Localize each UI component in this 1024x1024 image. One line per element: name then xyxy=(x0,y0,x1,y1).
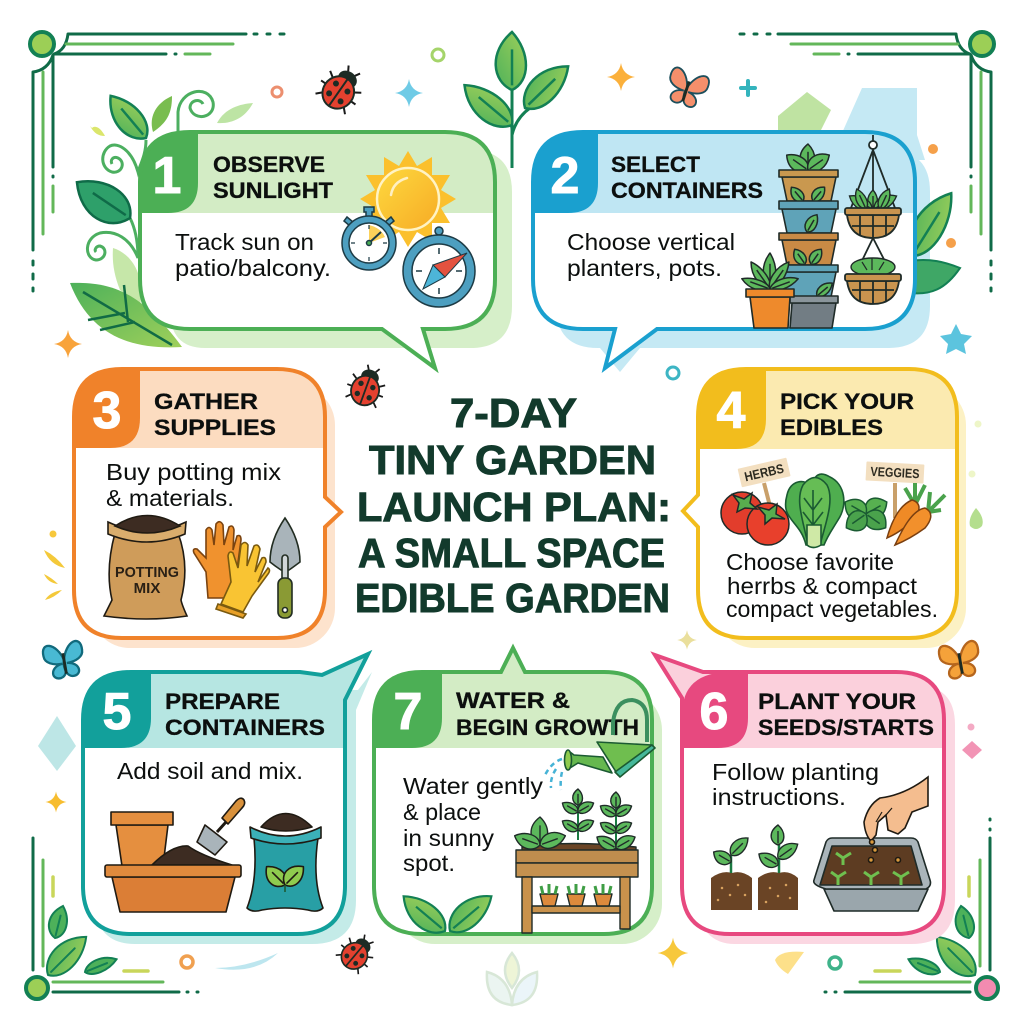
body text xyxy=(403,773,544,876)
heading xyxy=(154,389,276,440)
heading: SELECT xyxy=(611,152,701,177)
icon: ladybug top xyxy=(312,57,372,118)
heading xyxy=(165,689,325,740)
body text: compact vegetables. xyxy=(726,596,938,622)
swoosh: pale blue xyxy=(215,953,278,970)
heading: SEEDS/STARTS xyxy=(758,715,934,740)
body text xyxy=(567,229,735,281)
body text: Add soil and mix. xyxy=(117,758,303,784)
icon: veggies sign: VEGGIES xyxy=(870,464,920,481)
body text xyxy=(712,759,879,810)
heading: BEGIN GROWTH xyxy=(456,715,639,740)
number 5: 5 xyxy=(103,683,131,741)
icon: seedlings in soil xyxy=(710,825,801,910)
dots: pale green right xyxy=(972,424,978,474)
icon: hand with seeds xyxy=(864,777,928,862)
body text: patio/balcony. xyxy=(175,255,331,281)
ring: green xyxy=(432,49,444,61)
ring: orange bottom xyxy=(181,956,193,968)
icon: compass xyxy=(403,227,475,307)
number 1: 1 xyxy=(153,147,181,205)
body text: instructions. xyxy=(712,784,846,810)
title: 7-DAY xyxy=(450,390,577,436)
sparkle: gold left xyxy=(46,792,66,812)
body text: in sunny xyxy=(403,825,495,851)
shadow: card 2 xyxy=(556,150,930,372)
panel: step 5 prepare containers xyxy=(83,654,372,944)
heading: PICK YOUR xyxy=(780,389,914,414)
icon: basil xyxy=(840,493,892,536)
title: A SMALL SPACE xyxy=(358,530,665,576)
panel: step 1 observe sunlight xyxy=(140,132,495,368)
body text xyxy=(175,229,331,281)
sprays: yellow petals xyxy=(44,550,65,600)
dots: orange xyxy=(933,149,951,243)
drop: green right xyxy=(970,508,983,529)
title: LAUNCH PLAN: xyxy=(357,484,671,530)
icon: soil bag xyxy=(247,814,323,911)
star: blue xyxy=(940,324,972,354)
body text: herrbs & compact xyxy=(727,573,918,599)
heading: EDIBLES xyxy=(780,415,883,440)
shape: yellow fan xyxy=(775,952,804,974)
icon: trowel xyxy=(270,518,300,618)
heading xyxy=(780,389,914,440)
heading: CONTAINERS xyxy=(611,178,763,203)
sprays: yellow left xyxy=(50,530,57,538)
body text: Water gently xyxy=(403,773,544,799)
heading xyxy=(456,688,639,740)
panel: step 4 pick your edibles xyxy=(683,369,966,648)
border: bottom-right corner ornament xyxy=(825,819,998,999)
body text: & place xyxy=(403,799,481,825)
icon: pot, tray, soil and trowel xyxy=(105,798,245,912)
icon: two leaves xyxy=(395,886,499,941)
icon: tomatoes xyxy=(721,492,789,545)
icon: amber butterfly xyxy=(938,640,982,680)
heading: PREPARE xyxy=(165,689,280,714)
title xyxy=(355,390,671,621)
ring: orange xyxy=(272,87,282,97)
icon: stacked planters xyxy=(740,144,838,328)
title: TINY GARDEN xyxy=(369,437,656,483)
icon: watering can xyxy=(564,700,655,777)
heading: OBSERVE xyxy=(213,152,325,177)
icon: herbs sign xyxy=(738,458,791,510)
sparkle: orange left xyxy=(54,330,82,358)
sparkle: gold top xyxy=(607,63,635,91)
background shapes behind card 2 xyxy=(778,88,925,160)
body text: Follow planting xyxy=(712,759,879,785)
number 2: 2 xyxy=(551,147,579,205)
number 7: 7 xyxy=(394,683,422,741)
panel: step 2 select containers xyxy=(533,132,915,368)
icon: leafy greens xyxy=(786,474,844,548)
title: EDIBLE GARDEN xyxy=(355,575,670,621)
panel: step 3 gather supplies xyxy=(74,369,341,648)
sparkle: pale gold xyxy=(677,630,697,650)
icon: veggies sign xyxy=(866,461,924,518)
body text: Track sun on xyxy=(175,229,314,255)
heading: PLANT YOUR xyxy=(758,689,916,714)
heading: GATHER xyxy=(154,389,258,414)
dot: pink xyxy=(968,724,974,730)
icon: water drops xyxy=(545,759,562,790)
icon: orange butterfly xyxy=(663,66,711,111)
heading: SUNLIGHT xyxy=(213,178,334,203)
diamond: pink xyxy=(962,741,982,759)
icon: potting mix bag xyxy=(104,516,187,619)
icon: sun xyxy=(360,151,456,247)
icon: blue butterfly xyxy=(42,640,86,680)
ring: teal xyxy=(667,367,679,379)
heading: CONTAINERS xyxy=(165,715,325,740)
icon: herbs sign: HERBS xyxy=(743,461,786,484)
icon: yellow glove xyxy=(216,542,270,618)
sparkle: blue top xyxy=(395,79,423,107)
border: bottom-left corner ornament xyxy=(26,838,198,999)
icon: ladybug bottom xyxy=(333,927,382,977)
body text: planters, pots. xyxy=(567,255,722,281)
icon: hanging baskets xyxy=(845,135,901,304)
border: top-left corner ornament xyxy=(30,32,284,291)
number 4: 4 xyxy=(717,382,746,440)
shadow: card 1 xyxy=(170,150,512,348)
sparkle: gold bottom xyxy=(658,938,688,968)
icon: potting mix bag: POTTING xyxy=(115,564,179,581)
sparkle: teal plus xyxy=(741,81,755,95)
body text xyxy=(726,549,938,622)
diamond: pale teal xyxy=(38,716,76,771)
body text: Choose vertical xyxy=(567,229,735,255)
body text: Choose favorite xyxy=(726,549,894,575)
body text: spot. xyxy=(403,850,455,876)
body text: Buy potting mix xyxy=(106,459,282,485)
heading: WATER & xyxy=(456,688,570,713)
icon: left vine with leaves xyxy=(66,88,253,347)
heading xyxy=(758,689,934,740)
number 3: 3 xyxy=(93,382,121,440)
icon: right side leaves xyxy=(899,185,963,293)
icon: seed tray xyxy=(814,838,930,911)
icon: potting mix bag: MIX xyxy=(134,580,160,597)
heading: SUPPLIES xyxy=(154,415,276,440)
heading xyxy=(213,152,334,203)
border: top-right corner ornament xyxy=(740,32,994,291)
icon: ladybug middle xyxy=(342,360,391,411)
logo: faint bottom leaves xyxy=(487,953,537,1005)
icon: raised planter with seedlings xyxy=(512,789,638,933)
icon: orange glove xyxy=(193,522,241,598)
ring: green bottom xyxy=(829,957,841,969)
number 6: 6 xyxy=(700,683,728,741)
body text: & materials. xyxy=(106,485,234,511)
icon: stopwatch xyxy=(342,207,396,270)
icon: carrots xyxy=(887,483,945,545)
panel: step 7 water and begin growth xyxy=(374,648,662,944)
heading xyxy=(611,152,763,203)
icon: top centre sprout xyxy=(455,32,577,168)
body text xyxy=(106,459,282,511)
panel: step 6 plant your seeds/starts xyxy=(655,655,955,944)
